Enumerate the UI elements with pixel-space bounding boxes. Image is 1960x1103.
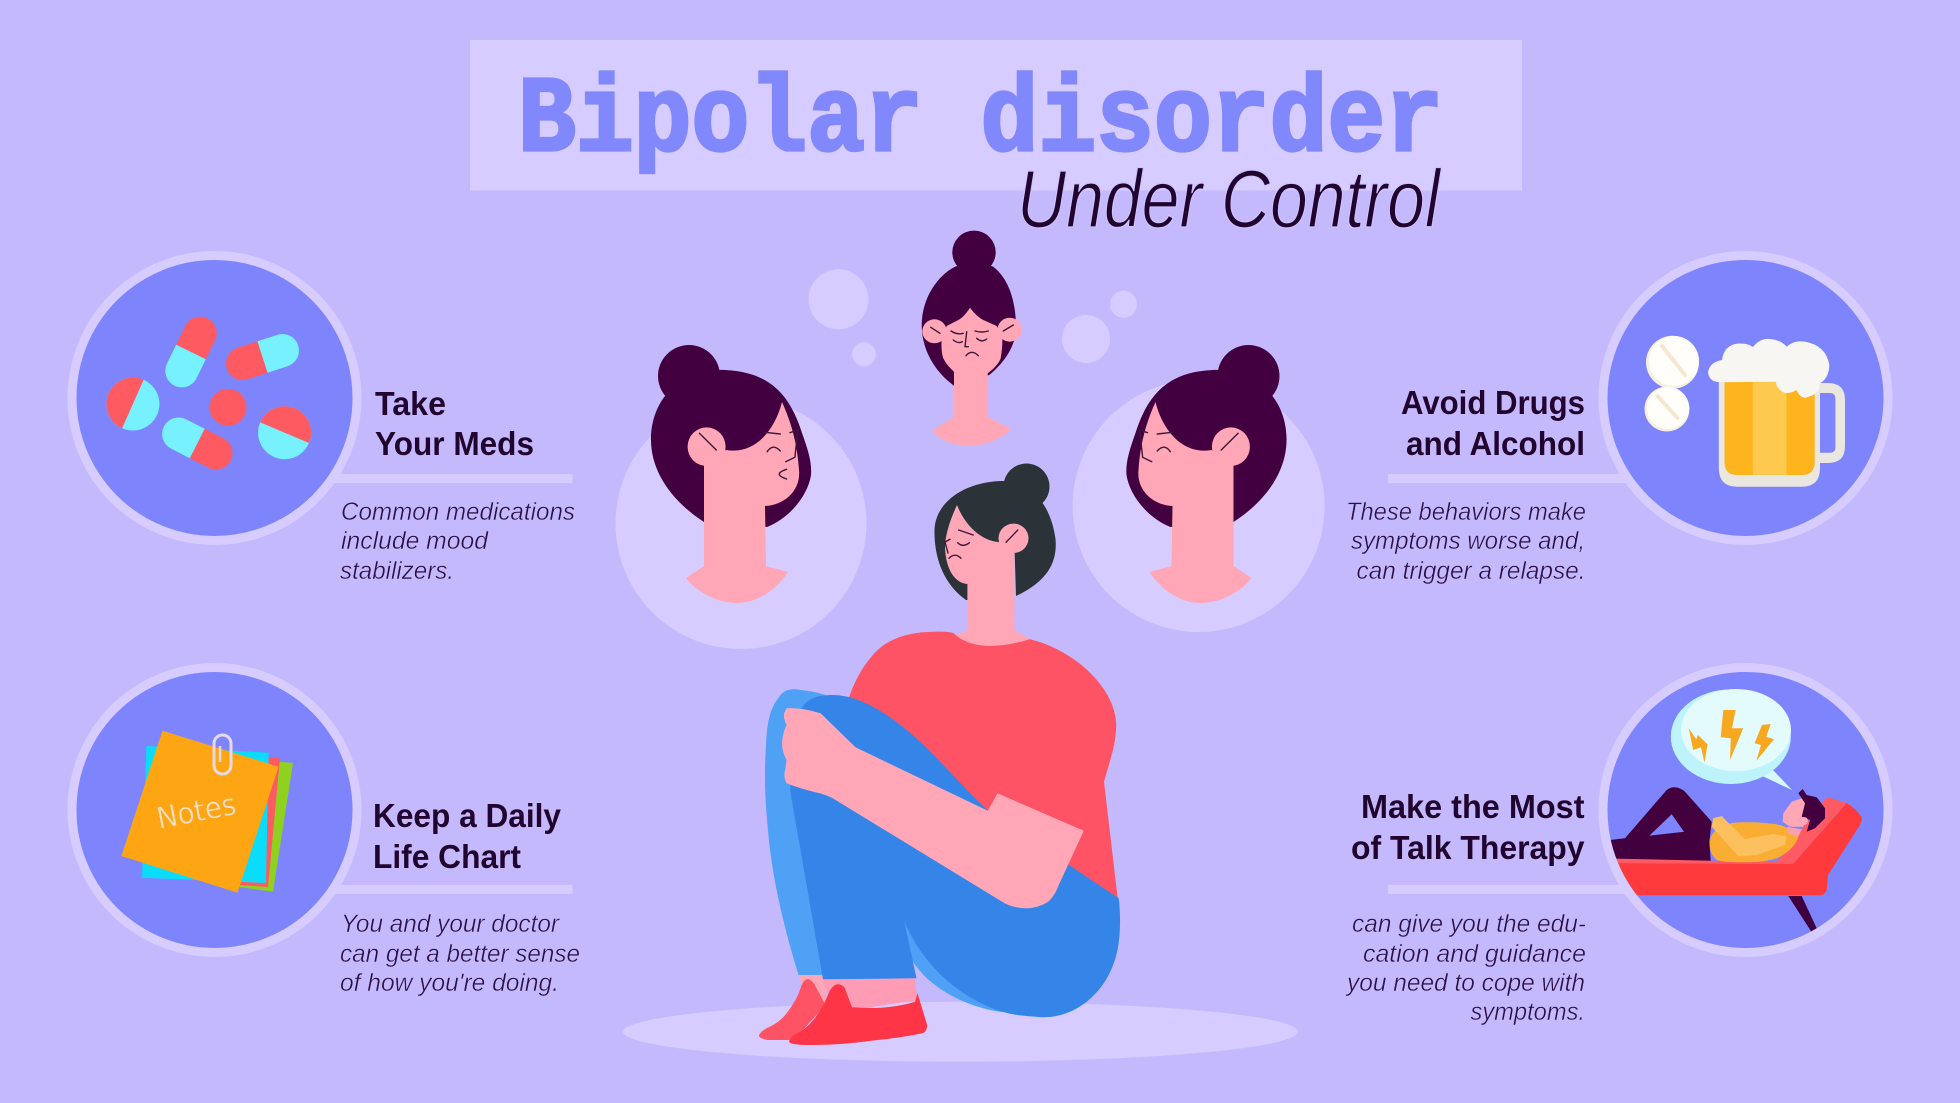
body text: can trigger a relapse.	[1356, 557, 1586, 585]
ear	[998, 524, 1028, 553]
body text: You and your doctor	[341, 910, 561, 938]
icon: patient on couch	[1600, 787, 1862, 932]
body text: Common medications	[341, 498, 575, 526]
subtitle: Under Control	[1017, 154, 1442, 245]
body text	[1346, 498, 1586, 585]
rule	[330, 885, 572, 894]
title: Bipolar disorder	[518, 61, 1443, 183]
ground shadow	[623, 1002, 1298, 1062]
body text: include mood	[341, 527, 489, 555]
hair	[1004, 464, 1050, 510]
body text: of how you're doing.	[340, 969, 559, 997]
heading: Take	[375, 385, 446, 422]
panel: avoid drugs and alcohol	[1346, 256, 1888, 585]
title banner	[470, 40, 1522, 190]
body text: These behaviors make	[1346, 498, 1586, 526]
body text	[1345, 910, 1586, 1026]
panel: daily life chart	[72, 668, 580, 997]
icon: pills	[98, 311, 319, 475]
face lines	[945, 530, 1018, 558]
icon: ring	[72, 256, 357, 540]
heading: Keep a Daily	[373, 797, 562, 834]
heading: Life Chart	[373, 838, 521, 875]
icon: sticky notes: Notes	[154, 787, 239, 837]
torso	[849, 632, 1118, 900]
icon: sticky notes	[121, 731, 293, 893]
top head	[922, 231, 1022, 446]
panel: talk therapy	[1345, 668, 1888, 1026]
body text: symptoms.	[1470, 998, 1585, 1026]
icon: tablets	[1644, 336, 1699, 432]
heading	[1401, 384, 1585, 462]
heading: and Alcohol	[1406, 425, 1585, 462]
panel: take your meds	[72, 256, 575, 585]
thought bubbles	[808, 269, 1137, 366]
title block	[470, 40, 1522, 245]
seated person	[759, 464, 1120, 1045]
rule	[1388, 885, 1632, 894]
body text	[340, 910, 580, 997]
thought circle: left head	[616, 345, 866, 649]
neck and face	[945, 505, 1035, 655]
heading	[373, 797, 562, 875]
heading: Make the Most	[1361, 788, 1585, 825]
heading: of Talk Therapy	[1351, 829, 1585, 866]
body text: can get a better sense	[340, 940, 580, 968]
body text	[340, 498, 575, 585]
body text: cation and guidance	[1363, 940, 1586, 968]
body text: symptoms worse and,	[1351, 527, 1585, 555]
icon: ring	[1603, 256, 1888, 540]
arm	[782, 708, 1084, 908]
heading: Avoid Drugs	[1401, 384, 1585, 421]
icon: beer mug	[1708, 339, 1845, 487]
body text: you need to cope with	[1345, 969, 1585, 997]
thought circle: right head	[1073, 345, 1325, 632]
rule	[1388, 474, 1632, 483]
trousers	[765, 689, 1120, 1017]
shoes and ankles	[759, 975, 927, 1045]
heading: Your Meds	[375, 425, 534, 462]
icon: speech bubble	[1671, 689, 1792, 790]
icon: ring	[1603, 668, 1888, 952]
rule	[330, 474, 572, 483]
icon: ring	[72, 668, 357, 952]
heading	[375, 385, 534, 462]
body text: stabilizers.	[340, 557, 454, 585]
heading	[1351, 788, 1585, 866]
body text: can give you the edu-	[1352, 910, 1586, 938]
